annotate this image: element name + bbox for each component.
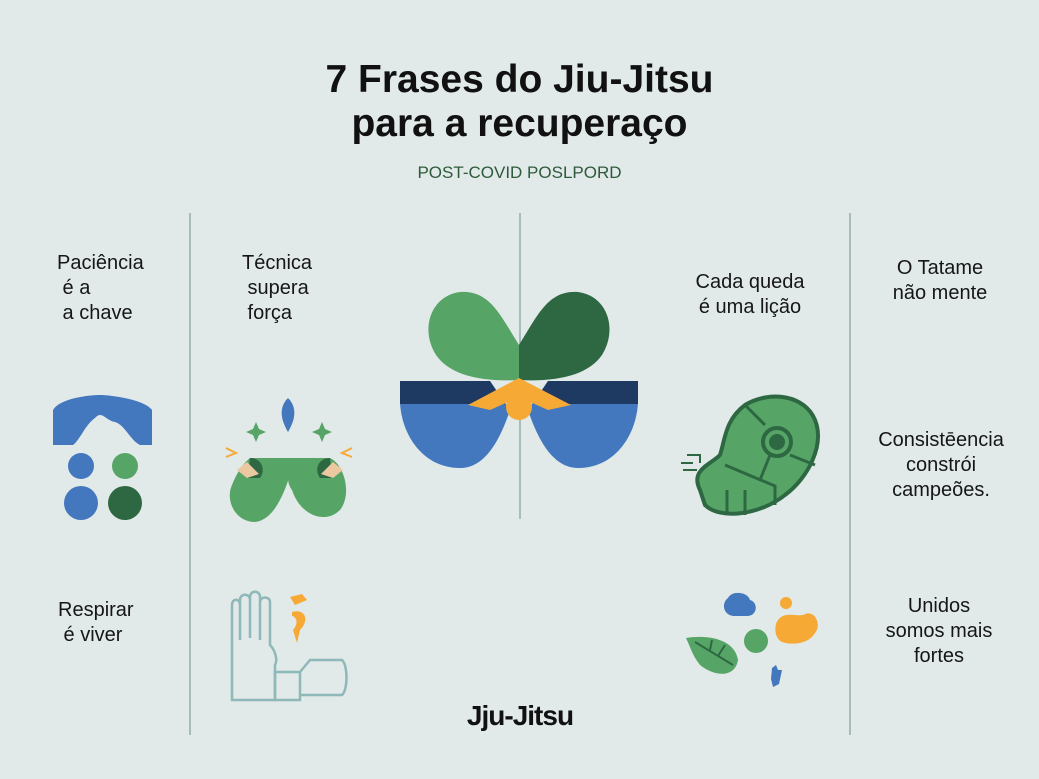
text: tatame: O Tatame [897,257,983,279]
text: consistência [878,429,1004,501]
icon: helmet and dots [53,395,152,520]
icon: unity shapes [686,593,818,687]
text: técnica: Técnica [242,252,312,274]
icon: hand and fist [232,592,346,700]
text: cada queda [696,271,804,318]
text: paciência [57,252,144,324]
text: tatame [893,257,987,304]
title [326,58,713,145]
text: técnica: supera [248,277,309,299]
text: respirar: é viver [64,624,122,646]
title: para a recuperaço [351,102,688,145]
text: técnica [242,252,312,324]
text: unidos [886,595,992,667]
text: cada queda: Cada queda [696,271,804,293]
subtitle: POST-COVID POSLPORD [417,163,622,182]
text: unidos: Unidos [908,595,970,617]
text: unidos: somos mais [886,620,992,642]
text: técnica: força [248,302,292,324]
text: respirar: Respirar [58,599,134,621]
text: unidos: fortes [914,645,964,667]
icon: central emblem [400,292,638,468]
icon: technique [226,398,352,522]
title: 7 Frases do Jiu-Jitsu [326,58,713,101]
text: cada queda: é uma lição [699,296,801,318]
text: tatame: não mente [893,282,987,304]
footer logo: Jju-Jitsu [467,700,573,731]
text: consistência: constrói [906,454,976,476]
icon: shoe [681,397,818,515]
text: respirar [58,599,134,646]
text: paciência: é a [63,277,90,299]
text: consistência: Consistēencia [878,429,1004,451]
text: paciência: a chave [63,302,133,324]
text: paciência: Paciência [57,252,144,274]
text: consistência: campeões. [892,479,990,501]
